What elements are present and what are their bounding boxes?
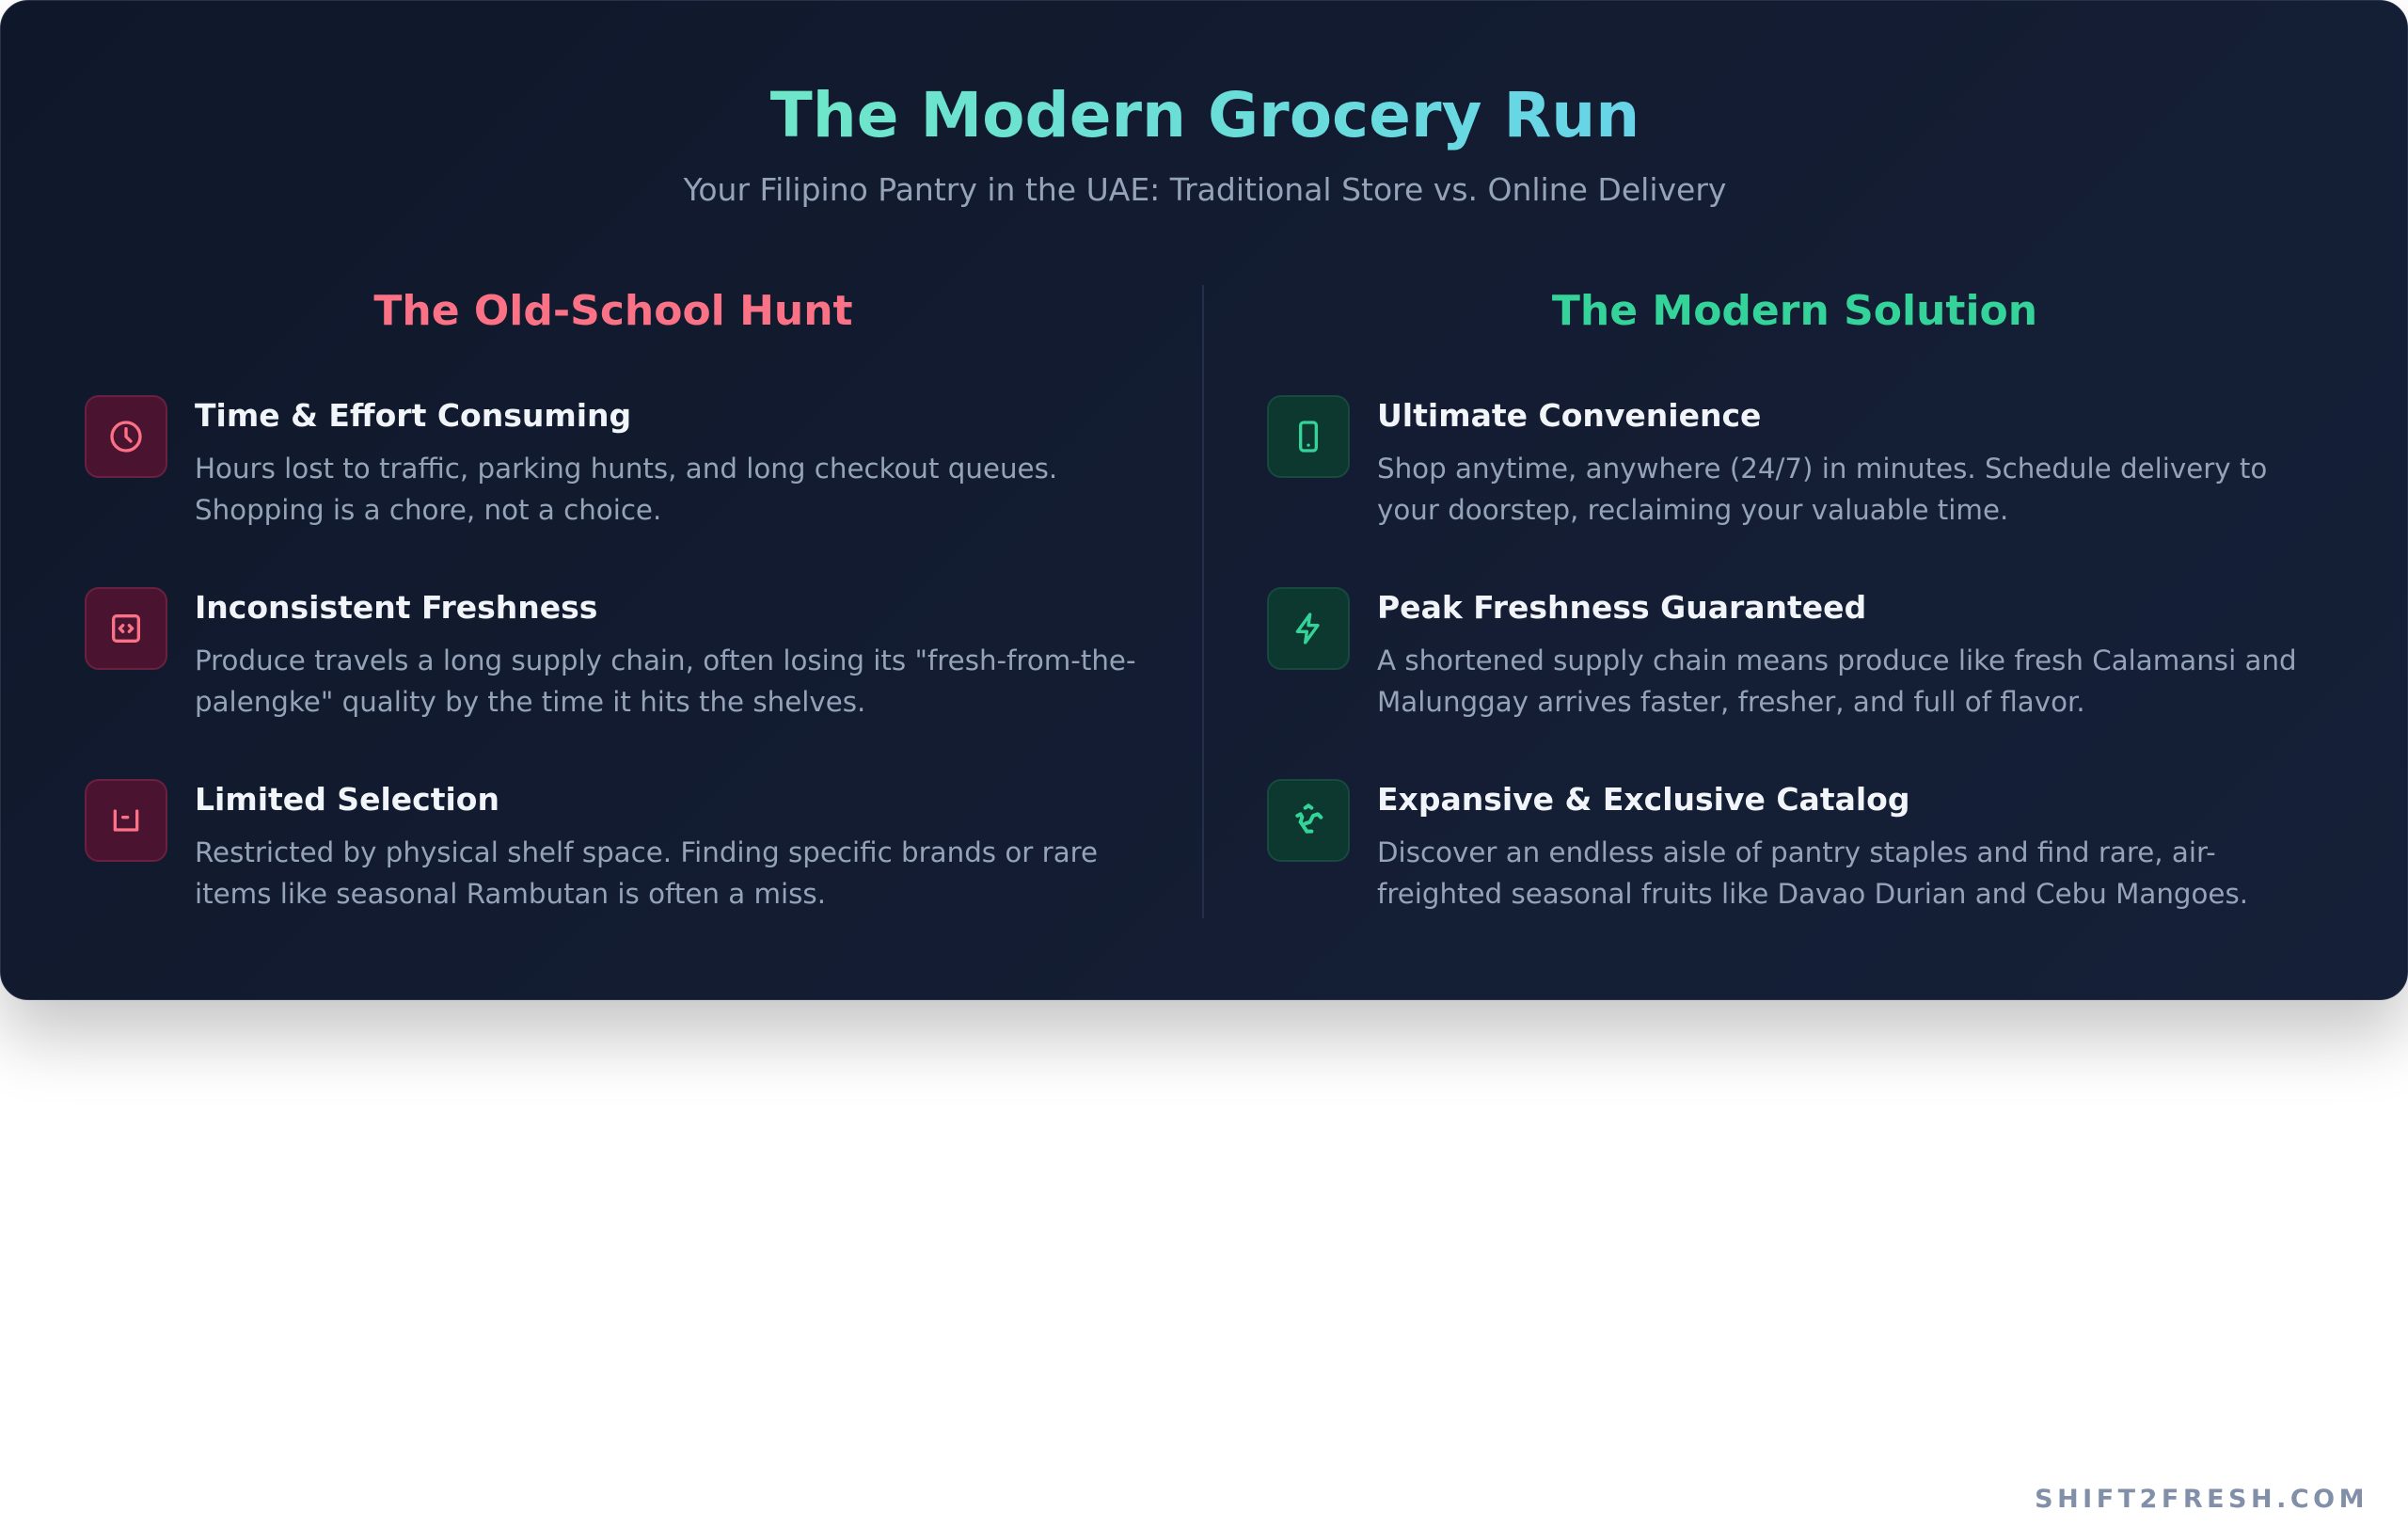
item description: Shop anytime, anywhere (24/7) in minutes. Schedule delivery to [1377, 453, 2267, 485]
item description: Restricted by physical shelf space. Finding specific brands or rare [195, 836, 1098, 868]
item: ultimate convenience [1267, 395, 2267, 526]
icon: box code [85, 587, 167, 670]
item description: Discover an endless aisle of pantry staples and find rare, air- [1377, 836, 2216, 868]
item description [1377, 644, 2297, 718]
item description [1377, 836, 2248, 910]
item description: items like seasonal Rambutan is often a miss. [195, 878, 826, 910]
item description: Produce travels a long supply chain, often losing its "fresh-from-the- [195, 644, 1136, 676]
heading: modern: The Modern Solution [1552, 287, 2037, 335]
card panel [0, 0, 2408, 1000]
item: time & effort [85, 395, 1057, 526]
item description [195, 644, 1136, 718]
item: limited selection [85, 779, 1098, 910]
item description [195, 836, 1098, 910]
item: peak freshness [1267, 587, 2297, 718]
title: The Modern Grocery Run [770, 79, 1640, 151]
item description: palengke" quality by the time it hits the shelves. [195, 686, 865, 718]
item title: Ultimate Convenience [1377, 397, 1761, 434]
divider [1202, 285, 1204, 918]
item description: A shortened supply chain means produce like fresh Calamansi and [1377, 644, 2297, 676]
item description: Malunggay arrives faster, fresher, and full of flavor. [1377, 686, 2085, 718]
icon: basket [85, 779, 167, 862]
item description: Shopping is a chore, not a choice. [195, 494, 661, 526]
icon: phone [1267, 395, 1350, 478]
item description: Hours lost to traffic, parking hunts, and long checkout queues. [195, 453, 1057, 485]
subtitle: Your Filipino Pantry in the UAE: Traditional Store vs. Online Delivery [684, 171, 1726, 208]
icon: clock [85, 395, 167, 478]
item description: your doorstep, reclaiming your valuable time. [1377, 494, 2008, 526]
item description [1377, 453, 2267, 526]
icon: plant [1267, 779, 1350, 862]
item title: Inconsistent Freshness [195, 589, 597, 626]
item title: Peak Freshness Guaranteed [1377, 589, 1866, 626]
heading: old-school: The Old-School Hunt [373, 287, 853, 335]
item title: Expansive & Exclusive Catalog [1377, 781, 1909, 818]
item: expansive catalog [1267, 779, 2248, 910]
item title: Limited Selection [195, 781, 499, 818]
icon: lightning [1267, 587, 1350, 670]
item title: Time & Effort Consuming [195, 397, 631, 434]
item: inconsistent freshness [85, 587, 1136, 718]
item description [195, 453, 1057, 526]
item description: freighted seasonal fruits like Davao Durian and Cebu Mangoes. [1377, 878, 2248, 910]
footer brand: SHIFT2FRESH.COM [2035, 1485, 2368, 1514]
